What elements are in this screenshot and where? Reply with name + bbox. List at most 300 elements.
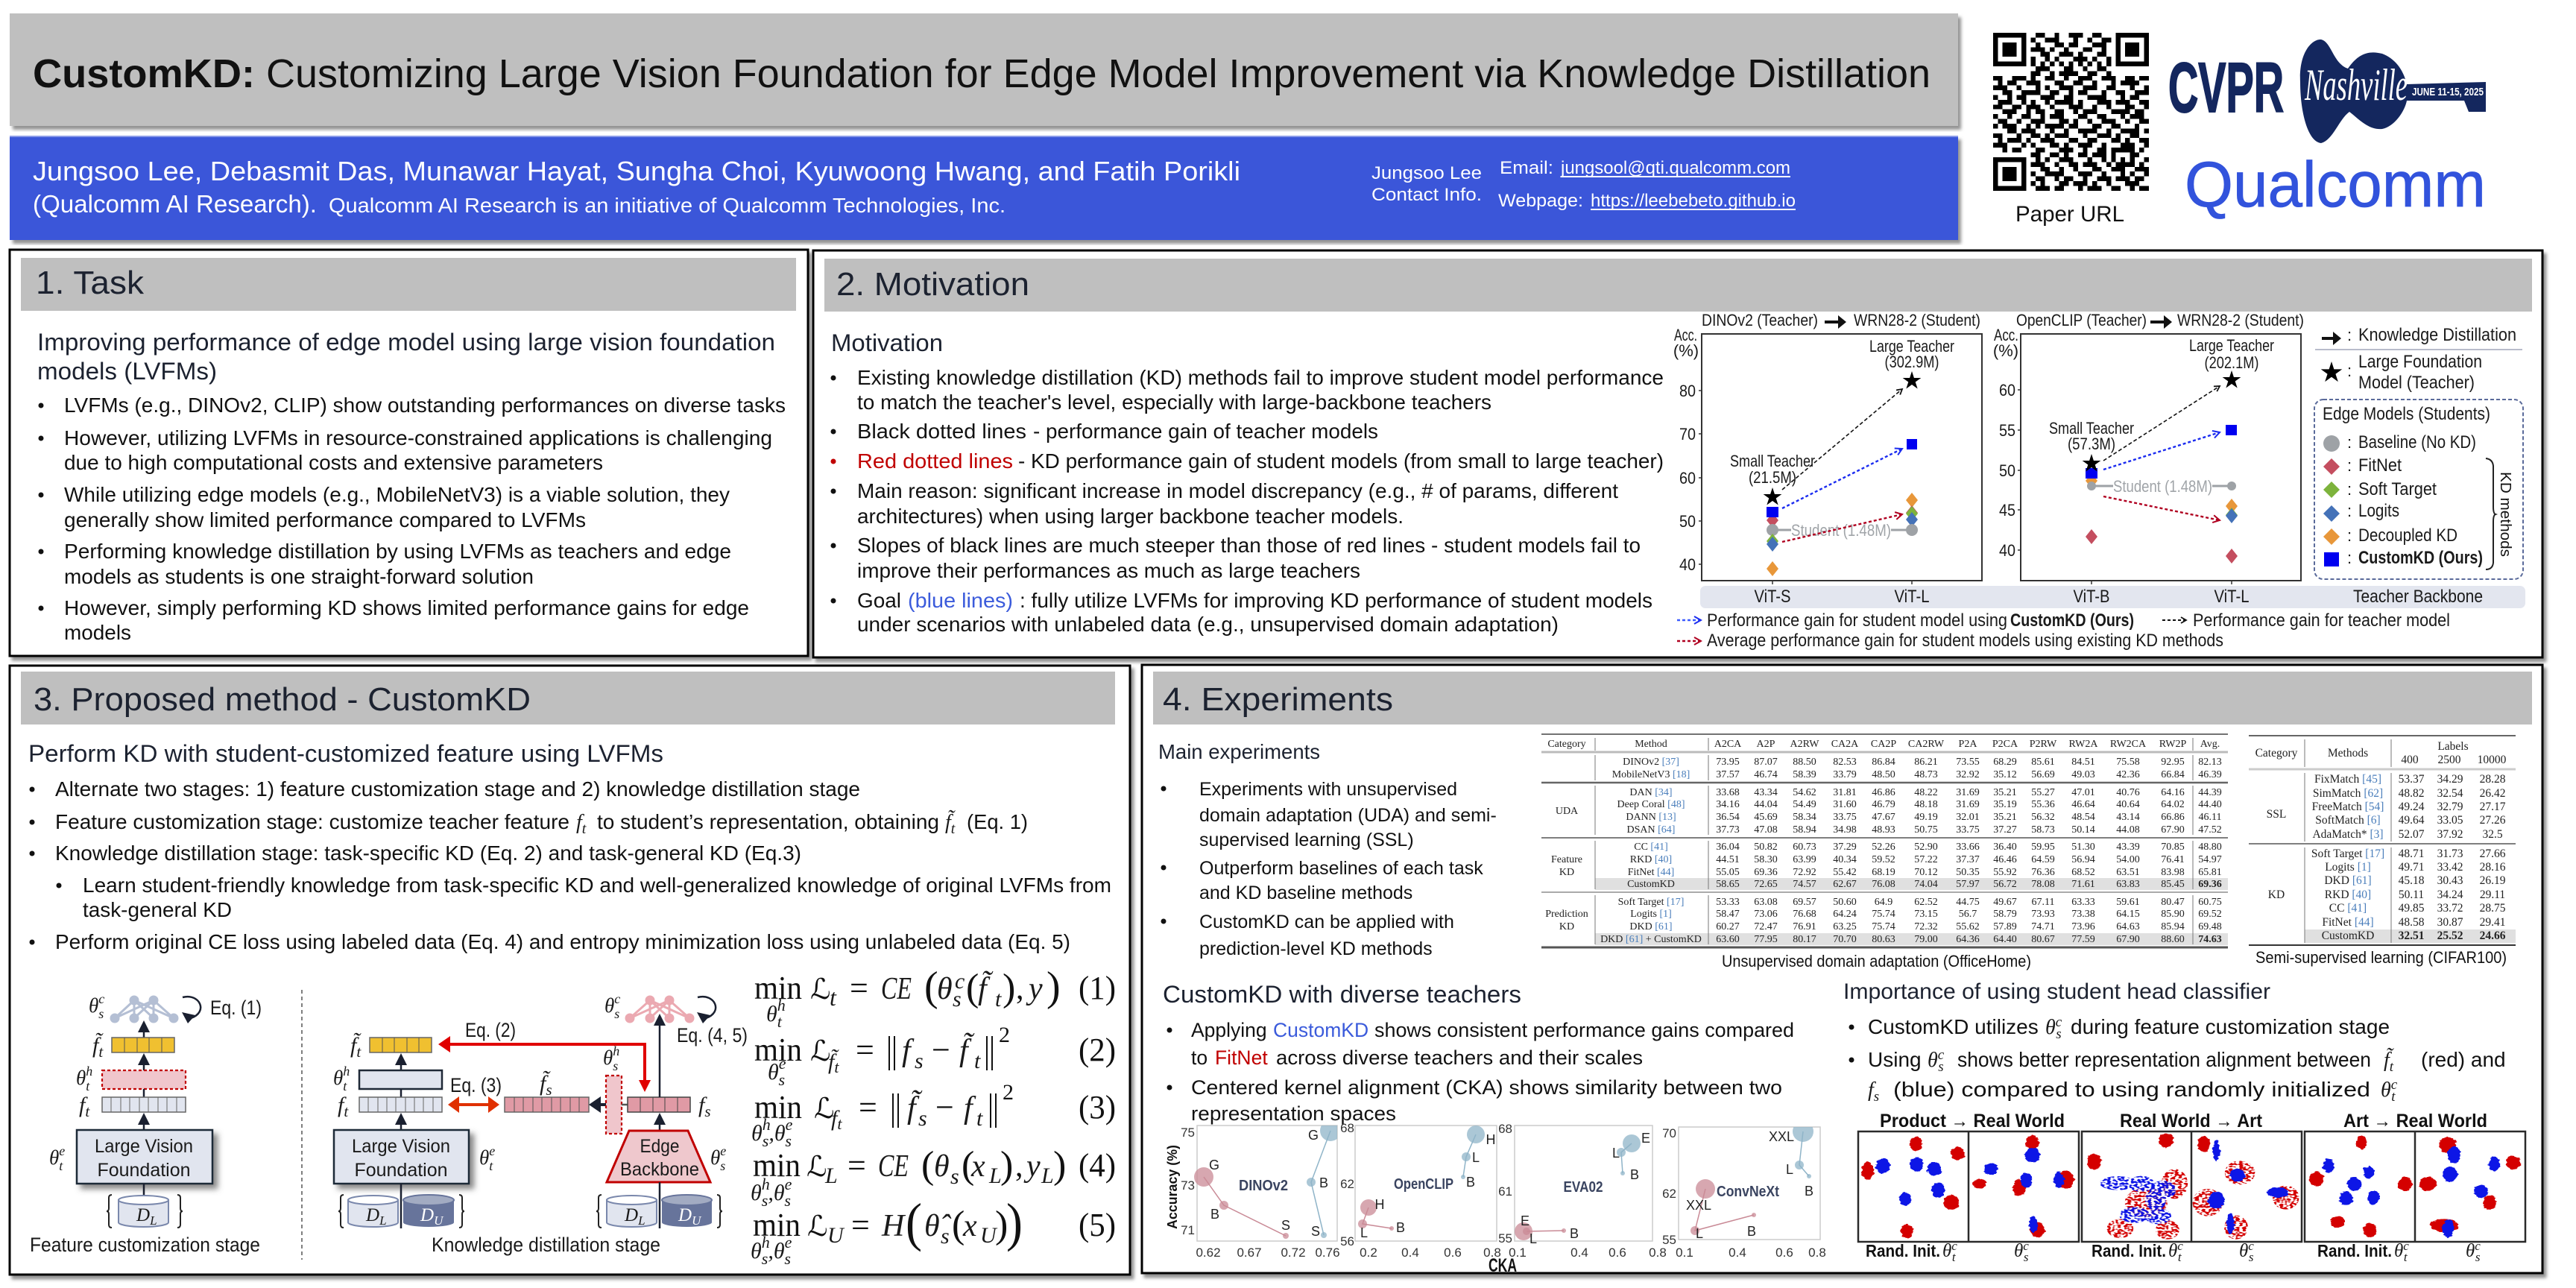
large vision foundation box: Foundation — [355, 1160, 447, 1181]
subplot EVA02: L — [1612, 1146, 1620, 1161]
icon: CVPR Nashville logo — [2168, 40, 2486, 143]
table: unsupervised domain adaptation: 85.45 — [2161, 879, 2185, 890]
table: unsupervised domain adaptation: 82.13 — [2198, 757, 2222, 768]
bullet list: - KD performance gain of student models (from small to large teacher) — [1018, 449, 1664, 473]
legend: edge models: : — [2347, 480, 2352, 499]
student head classifier text: c — [2391, 1077, 2398, 1093]
table: unsupervised domain adaptation: Avg. — [2200, 739, 2220, 750]
title bar — [10, 13, 1958, 126]
heading: 2. Motivation — [836, 266, 1029, 303]
subplot OpenCLIP: B — [1396, 1220, 1405, 1235]
table: semi-supervised learning: 49.71 — [2399, 861, 2424, 874]
subplot OpenCLIP: 68 — [1340, 1121, 1354, 1135]
lead text: Perform KD with student-customized feature using LVFMs — [28, 740, 663, 767]
table: semi-supervised learning: 50.11 — [2399, 888, 2424, 901]
contact label: Contact Info. — [1371, 185, 1482, 205]
equation 4: ) — [1053, 1144, 1066, 1187]
author banner — [10, 136, 1958, 240]
diagram: knowledge distillation stage: θ — [603, 1046, 613, 1069]
chart: DINOv2 teacher to WRN28-2 student: 50 — [1679, 512, 1696, 531]
table: unsupervised domain adaptation: 57.89 — [1993, 921, 2017, 932]
arrow: head to feature — [589, 1096, 606, 1113]
table: unsupervised domain adaptation: 44.51 — [1716, 854, 1740, 865]
equation 3: f — [831, 1106, 837, 1131]
diagram: feature customization stage: θ — [76, 1067, 86, 1089]
equation 1: t — [995, 987, 1002, 1011]
table: semi-supervised learning: FreeMatch [54] — [2312, 801, 2384, 813]
table: unsupervised domain adaptation: 73.93 — [2031, 909, 2055, 920]
table: unsupervised domain adaptation: A2CA — [1714, 739, 1742, 750]
table: unsupervised domain adaptation: 42.36 — [2116, 769, 2140, 780]
table: unsupervised domain adaptation: 68.52 — [2071, 867, 2095, 878]
y axis title: Accuracy (%) — [1165, 1145, 1180, 1229]
table: unsupervised domain adaptation: 73.38 — [2071, 909, 2095, 920]
equation 3: t — [837, 1114, 842, 1133]
table: unsupervised domain adaptation: 48.54 — [2071, 812, 2095, 823]
subplot ConvNeXt: 0.1 — [1676, 1246, 1693, 1260]
equation 5: x — [962, 1209, 977, 1243]
table: semi-supervised learning: 49.85 — [2399, 902, 2425, 915]
table: semi-supervised learning: 28.75 — [2480, 902, 2506, 915]
table: unsupervised domain adaptation: 69.57 — [1793, 897, 1816, 908]
table: unsupervised domain adaptation: 43.34 — [1754, 787, 1778, 798]
subplot ConvNeXt: B — [1747, 1224, 1756, 1239]
equation 2: = — [856, 1032, 874, 1068]
scatter bottom labels: θ — [2394, 1241, 2403, 1261]
subplot DINOv2: 73 — [1181, 1178, 1195, 1193]
table: unsupervised domain adaptation: 31.69 — [1956, 787, 1980, 798]
student head classifier text: shows better representation alignment between — [1957, 1048, 2371, 1071]
bullet list — [39, 394, 786, 644]
table: semi-supervised learning: 32.51 — [2399, 929, 2424, 942]
legend: edge models: Soft Target — [2358, 479, 2437, 499]
table: unsupervised domain adaptation: 83.98 — [2161, 867, 2185, 878]
equation 2 — [754, 1023, 1116, 1089]
main experiments text: CustomKD can be applied with — [1199, 912, 1454, 932]
table: semi-supervised learning: 28.28 — [2480, 773, 2506, 786]
equation 1: ) — [1003, 967, 1015, 1009]
table: semi-supervised learning: 29.11 — [2480, 888, 2505, 901]
bullet list: Knowledge distillation stage: task-specific KD (Eq. 2) and task-general KD (Eq.3) — [55, 842, 801, 865]
chart: OpenCLIP teacher to WRN28-2 student: 60 — [1999, 381, 2015, 400]
equation 3: = — [859, 1089, 877, 1126]
subplot DINOv2: 0.67 — [1237, 1246, 1262, 1260]
table: unsupervised domain adaptation: 64.16 — [2161, 787, 2185, 798]
student head classifier text: θ — [2045, 1016, 2056, 1039]
table: unsupervised domain adaptation: 40.34 — [1833, 854, 1857, 865]
x axis band: ViT-B — [2074, 587, 2109, 607]
subplot ConvNeXt: L — [1696, 1226, 1703, 1241]
equation 2: f̃ — [959, 1032, 975, 1068]
table: unsupervised domain adaptation: 76.41 — [2161, 854, 2185, 865]
edge backbone: Backbone — [620, 1159, 699, 1180]
table: unsupervised domain adaptation: KD — [1559, 921, 1574, 932]
scatter titles: Real World → Art — [2120, 1111, 2263, 1131]
equation 2: f̃ — [828, 1049, 834, 1074]
equation 1: f̃ — [978, 970, 994, 1006]
table: unsupervised domain adaptation: 63.51 — [2116, 867, 2140, 878]
table: unsupervised domain adaptation: 63.08 — [1754, 897, 1778, 908]
legend: line meanings — [1677, 610, 2450, 651]
labeled data cylinder — [107, 1195, 183, 1228]
subplot ConvNeXt: 55 — [1662, 1233, 1676, 1247]
equation 1: (1) — [1079, 970, 1116, 1006]
equation 5: θ — [751, 1239, 762, 1263]
panel: 4. Experiments — [1142, 665, 2542, 1276]
caption: Feature customization stage — [30, 1234, 260, 1256]
legend: line meanings: Average performance gain for student models using existing KD methods — [1707, 631, 2223, 651]
scatter bottom labels: s — [2024, 1250, 2029, 1264]
table: unsupervised domain adaptation: FitNet [44] — [1628, 867, 1674, 878]
equations — [751, 964, 1116, 1268]
table: unsupervised domain adaptation: 73.15 — [1914, 909, 1938, 920]
diverse teachers text: representation spaces — [1191, 1102, 1396, 1125]
table: unsupervised domain adaptation: RW2A — [2069, 739, 2098, 750]
equation 2: min — [754, 1032, 802, 1068]
legend: markers: Large Foundation — [2358, 352, 2482, 372]
table: unsupervised domain adaptation: 58.79 — [1993, 909, 2017, 920]
table: unsupervised domain adaptation: 75.74 — [1872, 921, 1895, 932]
diverse teachers text: CustomKD with diverse teachers — [1163, 981, 1521, 1008]
chart: DINOv2 teacher to WRN28-2 student: 70 — [1679, 425, 1696, 443]
table: unsupervised domain adaptation: 82.53 — [1833, 757, 1857, 768]
table: unsupervised domain adaptation: 84.51 — [2071, 757, 2095, 768]
equation 5: U — [827, 1223, 845, 1248]
student head dashed — [606, 1076, 622, 1134]
diagram: feature customization stage: s — [98, 1006, 104, 1021]
table: unsupervised domain adaptation: 46.64 — [2071, 799, 2095, 810]
equation 2: s — [779, 1070, 785, 1089]
equation 5: min — [753, 1207, 801, 1243]
table: semi-supervised learning: 33.42 — [2437, 861, 2463, 874]
contact links: Email: — [1500, 158, 1553, 178]
panel: 1. Task — [10, 250, 808, 656]
bullet list: task-general KD — [83, 898, 232, 921]
customized teacher feature — [370, 1038, 432, 1052]
table: semi-supervised learning: 30.43 — [2437, 874, 2463, 887]
data cylinders student — [596, 1195, 722, 1228]
arrow: feature matching — [448, 1096, 499, 1113]
diagram: knowledge distillation stage: e — [720, 1143, 726, 1158]
table: semi-supervised learning: Labels — [2437, 740, 2469, 753]
large vision foundation box — [334, 1130, 469, 1184]
main experiments text: domain adaptation (UDA) and semi- — [1199, 805, 1497, 826]
chart title: DINOv2 (Teacher) — [1702, 311, 1818, 329]
diagram: knowledge distillation stage: t — [356, 1043, 362, 1061]
main experiments text: Outperform baselines of each task — [1199, 858, 1483, 879]
main experiments text: and KD baseline methods — [1199, 883, 1412, 903]
table: unsupervised domain adaptation: 32.01 — [1956, 812, 1980, 823]
student baseline: Student (1.48M) — [1791, 521, 1891, 540]
subplot DINOv2: B — [1319, 1175, 1328, 1190]
icon: loop arrow — [697, 997, 716, 1023]
labeled data cylinder: D — [136, 1205, 150, 1225]
table: unsupervised domain adaptation: 92.95 — [2161, 757, 2185, 768]
equation 3: s — [918, 1106, 927, 1131]
bullet list: Perform original CE loss using labeled data (Eq. 4) and entropy minimization loss using unlabeled data (Eq. 5) — [55, 930, 1070, 953]
diverse teachers text: to — [1191, 1046, 1208, 1069]
subplot ConvNeXt: XXL — [1686, 1198, 1711, 1213]
table: unsupervised domain adaptation: 34.98 — [1833, 824, 1857, 836]
table: unsupervised domain adaptation: 73.55 — [1956, 757, 1980, 768]
arrows — [2103, 386, 2220, 520]
table caption: Semi-supervised learning (CIFAR100) — [2255, 948, 2507, 967]
subplot ConvNeXt — [1662, 1121, 1826, 1260]
table: unsupervised domain adaptation: 45.69 — [1754, 812, 1778, 823]
table: unsupervised domain adaptation: 64.59 — [2031, 854, 2055, 865]
diverse teachers text: across diverse teachers and their scales — [1276, 1046, 1643, 1069]
bullet list: generally show limited performance compared to LVFMs — [64, 508, 586, 531]
table: unsupervised domain adaptation: 36.54 — [1716, 812, 1740, 823]
table: semi-supervised learning: 37.92 — [2437, 828, 2463, 841]
table: unsupervised domain adaptation: 62.52 — [1914, 897, 1938, 908]
table: unsupervised domain adaptation: DKD [61] — [1629, 921, 1673, 932]
student head classifier text: f̃ — [2384, 1049, 2390, 1072]
table: unsupervised domain adaptation: 69.48 — [2198, 921, 2222, 932]
bullet list: However, simply performing KD shows limited performance gains for edge — [64, 596, 749, 619]
subplot OpenCLIP: H — [1486, 1132, 1495, 1147]
legend: edge models: : — [2347, 433, 2352, 452]
table: semi-supervised learning: CC [41] — [2329, 902, 2367, 915]
subplot EVA02: B — [1630, 1167, 1639, 1182]
subplot OpenCLIP: 0.6 — [1444, 1246, 1462, 1260]
main experiments text: Experiments with unsupervised — [1199, 779, 1457, 800]
table: unsupervised domain adaptation: 58.39 — [1793, 769, 1816, 780]
subplot DINOv2: 71 — [1181, 1223, 1195, 1237]
equation 5: ) — [1006, 1193, 1023, 1252]
table: unsupervised domain adaptation: 69.36 — [2198, 879, 2222, 890]
equation 1: t — [777, 1012, 783, 1031]
table: unsupervised domain adaptation: 48.22 — [1914, 787, 1938, 798]
table: semi-supervised learning: 2500 — [2437, 754, 2461, 766]
large vision foundation box: Large Vision — [352, 1136, 450, 1157]
table: unsupervised domain adaptation: 74.63 — [2198, 934, 2222, 945]
legend: edge models: Logits — [2358, 501, 2399, 521]
chart: CKA vs accuracy — [1165, 1120, 1826, 1276]
table: unsupervised domain adaptation: P2CA — [1992, 739, 2018, 750]
equation 3 — [751, 1080, 1116, 1150]
labeled data cylinder: L — [149, 1213, 157, 1228]
subplot EVA02: 55 — [1498, 1231, 1512, 1246]
equation 4: CE — [878, 1149, 909, 1184]
table: semi-supervised learning: SimMatch [62] — [2313, 787, 2383, 800]
equation 4: h — [762, 1175, 770, 1193]
data cylinders teacher: L — [379, 1213, 387, 1228]
t-SNE figure — [1858, 1111, 2525, 1264]
subplot ConvNeXt: B — [1805, 1184, 1813, 1199]
scatter bottom labels: Rand. Init. — [2317, 1241, 2392, 1260]
scatter bottom labels: c — [2023, 1239, 2029, 1253]
chart: DINOv2 teacher to WRN28-2 student — [1673, 311, 1982, 584]
table: semi-supervised learning: 25.52 — [2437, 929, 2463, 942]
chart: OpenCLIP teacher to WRN28-2 student: 40 — [1999, 541, 2015, 560]
equation 4: e — [785, 1175, 792, 1193]
table: unsupervised domain adaptation: 50.60 — [1833, 897, 1857, 908]
bullet list: f — [576, 811, 582, 834]
bullet list: Existing knowledge distillation (KD) methods fail to improve student model performance — [857, 366, 1664, 389]
student head classifier text: θ — [1928, 1049, 1938, 1072]
table: semi-supervised learning: 53.37 — [2399, 773, 2425, 786]
table: unsupervised domain adaptation: 35.12 — [1993, 769, 2017, 780]
subplot EVA02: 61 — [1498, 1184, 1512, 1199]
diagram: knowledge distillation stage: s — [720, 1158, 725, 1173]
markers large teacher — [1903, 371, 1921, 536]
equation 5: s — [784, 1249, 791, 1268]
student head classifier text: Using — [1868, 1048, 1922, 1071]
table: unsupervised domain adaptation: 86.21 — [1914, 757, 1938, 768]
table: unsupervised domain adaptation: 65.81 — [2198, 867, 2222, 878]
table: unsupervised domain adaptation: 69.36 — [1754, 867, 1778, 878]
subplot OpenCLIP: B — [1466, 1175, 1475, 1190]
table: unsupervised domain adaptation: 57.22 — [1914, 854, 1938, 865]
equation 2: − — [932, 1032, 950, 1068]
subplot OpenCLIP: 0.8 — [1483, 1246, 1501, 1260]
teacher labels: (202.1M) — [2205, 353, 2258, 372]
table: unsupervised domain adaptation: 31.60 — [1833, 799, 1857, 810]
table: unsupervised domain adaptation: 49.67 — [1993, 897, 2017, 908]
table: unsupervised domain adaptation: 47.08 — [1754, 824, 1778, 836]
subplot OpenCLIP: L — [1472, 1150, 1480, 1165]
bullet list: Red dotted lines — [857, 449, 1013, 473]
table: unsupervised domain adaptation: MobileNetV3 [18] — [1612, 769, 1690, 780]
equation 3: (3) — [1079, 1089, 1116, 1126]
legend: line meanings: Performance gain for student model using — [1707, 610, 2007, 631]
student head classifier text: c — [1938, 1047, 1945, 1063]
legend: edge models: Baseline (No KD) — [2358, 432, 2476, 452]
legend: markers: : — [2347, 326, 2352, 344]
table: unsupervised domain adaptation: 33.66 — [1956, 842, 1980, 853]
diagram: feature customization stage: t — [85, 1102, 90, 1120]
table: unsupervised domain adaptation: 37.73 — [1716, 824, 1740, 836]
customized teacher feature — [112, 1038, 174, 1052]
equation 5: ( — [906, 1193, 922, 1252]
subplot EVA02: L — [1530, 1231, 1537, 1246]
caption: Knowledge distillation stage — [432, 1234, 660, 1256]
table: unsupervised domain adaptation: RW2P — [2159, 739, 2186, 750]
table: unsupervised domain adaptation: UDA — [1556, 806, 1579, 817]
table: unsupervised domain adaptation: 63.83 — [2116, 879, 2140, 890]
table: unsupervised domain adaptation: 73.95 — [1716, 757, 1740, 768]
diagram: knowledge distillation stage — [333, 991, 748, 1256]
scatter bottom labels: s — [2249, 1250, 2254, 1264]
scatter bottom labels: c — [2475, 1239, 2481, 1253]
large vision foundation box: Foundation — [97, 1160, 191, 1181]
table: semi-supervised learning: 32.5 — [2482, 828, 2503, 841]
table: semi-supervised learning: 30.87 — [2437, 916, 2463, 929]
icon: CVPR Nashville logo: JUNE 11-15, 2025 — [2412, 86, 2484, 98]
bullet list: Performing knowledge distillation by using LVFMs as teachers and edge — [64, 540, 731, 563]
student feature — [628, 1097, 690, 1112]
table: semi-supervised learning: CustomKD — [2322, 929, 2374, 942]
table: unsupervised domain adaptation: 40.64 — [2116, 799, 2140, 810]
contact label — [1371, 163, 1482, 205]
equation 5: H — [881, 1209, 906, 1243]
affiliation — [33, 190, 1006, 218]
diagram: knowledge distillation stage: f — [698, 1093, 704, 1117]
equation 3: ,θ — [768, 1121, 786, 1146]
teacher labels: (57.3M) — [2068, 435, 2115, 453]
label Eq. 4,5: Eq. (4, 5) — [677, 1024, 748, 1046]
table: unsupervised domain adaptation: 44.08 — [2116, 824, 2140, 836]
data cylinders teacher: D — [366, 1205, 379, 1225]
panel: 2. Motivation — [813, 250, 2542, 657]
legend: edge models: : — [2347, 456, 2352, 475]
table: unsupervised domain adaptation: 60.27 — [1716, 921, 1740, 932]
chart: OpenCLIP teacher to WRN28-2 student: 50 — [1999, 461, 2015, 480]
bullet list: Black dotted lines — [857, 420, 1026, 443]
scatter titles: Product → Real World — [1880, 1111, 2065, 1131]
table: unsupervised domain adaptation: CA2RW — [1908, 739, 1945, 750]
table: unsupervised domain adaptation: 68.29 — [1993, 757, 2017, 768]
subplot ConvNeXt: XXL — [1769, 1129, 1794, 1144]
diagram: feature customization stage: θ — [49, 1146, 59, 1169]
equation 4: s — [950, 1164, 959, 1189]
subplot EVA02: E — [1641, 1131, 1650, 1146]
x axis title: CKA — [1489, 1255, 1517, 1276]
table: unsupervised domain adaptation: 64.36 — [1956, 934, 1980, 945]
contact links: https://leebebeto.github.io — [1591, 191, 1796, 211]
table: semi-supervised learning: 400 — [2401, 754, 2419, 766]
equation 1: h — [777, 996, 786, 1014]
table: unsupervised domain adaptation: 75.74 — [1872, 909, 1895, 920]
equation 1: θ — [937, 972, 953, 1006]
subplot EVA02: 0.4 — [1570, 1246, 1588, 1260]
diagram: feature customization stage: f̃ — [92, 1033, 98, 1058]
table: unsupervised domain adaptation: 66.86 — [2161, 812, 2185, 823]
subplot EVA02: B — [1570, 1226, 1579, 1241]
affiliation: Qualcomm AI Research is an initiative of Qualcomm Technologies, Inc. — [329, 194, 1006, 217]
divider between stages — [301, 990, 303, 1260]
x axis band: Teacher Backbone — [2353, 587, 2483, 607]
table: unsupervised domain adaptation: 40.76 — [2116, 787, 2140, 798]
subplot ConvNeXt: 0.4 — [1729, 1246, 1746, 1260]
equation 1: c — [955, 969, 965, 994]
table: semi-supervised learning: 27.17 — [2480, 801, 2506, 813]
equation 1: y — [1026, 972, 1043, 1006]
subplot OpenCLIP: 56 — [1340, 1234, 1354, 1248]
bullet list: Goal — [857, 589, 901, 612]
bullet list: f̃ — [945, 811, 951, 834]
bullet list: Main reason: significant increase in model discrepancy (e.g., # of params, different — [857, 479, 1618, 502]
subplot OpenCLIP: 62 — [1340, 1177, 1354, 1191]
scatter bottom labels: c — [1951, 1239, 1957, 1253]
heading: 1. Task — [36, 265, 145, 301]
table: unsupervised domain adaptation: 43.14 — [2116, 812, 2140, 823]
chart title — [2016, 311, 2304, 329]
table: semi-supervised learning: Category — [2255, 747, 2298, 760]
student head classifier text: t — [2390, 1059, 2394, 1075]
title bar: CustomKD: — [33, 51, 255, 96]
table: unsupervised domain adaptation: A2RW — [1790, 739, 1819, 750]
table: semi-supervised learning: 26.19 — [2480, 874, 2506, 887]
icon: Qualcomm logo: Qualcomm — [2185, 149, 2486, 221]
table: semi-supervised learning: 24.66 — [2480, 929, 2506, 942]
table: unsupervised domain adaptation: 75.58 — [2116, 757, 2140, 768]
equation 3: s — [763, 1131, 768, 1150]
equation 4: (4) — [1079, 1147, 1116, 1184]
affiliation: (Qualcomm AI Research). — [33, 190, 317, 218]
student head classifier text: Importance of using student head classifier — [1843, 979, 2270, 1004]
equation 4: ,θ — [768, 1181, 785, 1205]
table: unsupervised domain adaptation: 48.50 — [1872, 769, 1895, 780]
table: unsupervised domain adaptation: 70.12 — [1914, 867, 1938, 878]
subplot ConvNeXt: 0.6 — [1775, 1246, 1793, 1260]
table: unsupervised domain adaptation: 51.30 — [2071, 842, 2095, 853]
table: unsupervised domain adaptation: CC [41] — [1634, 842, 1668, 853]
arrows — [1782, 389, 1902, 542]
table: unsupervised domain adaptation: 33.75 — [1956, 824, 1980, 836]
equation 5: s — [941, 1224, 950, 1248]
